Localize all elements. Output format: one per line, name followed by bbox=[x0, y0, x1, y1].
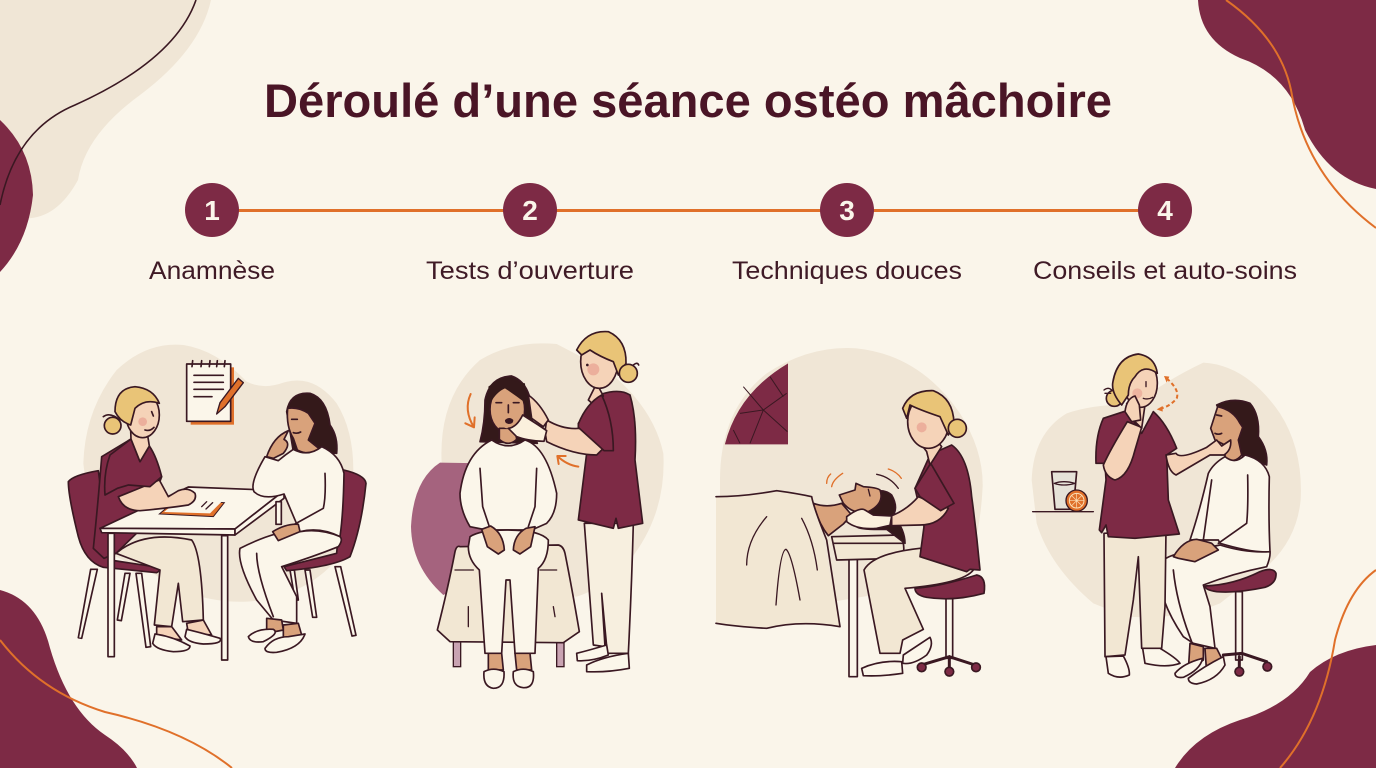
nurse arm, torso and head bbox=[103, 387, 195, 511]
patient bbox=[240, 393, 344, 652]
illustration: techniques douces bbox=[716, 348, 985, 677]
stool bbox=[1205, 570, 1276, 676]
background blob bbox=[83, 345, 353, 602]
step 4 marker: 4 bbox=[1157, 195, 1173, 226]
drape bbox=[716, 491, 840, 628]
step 2 marker: 2 bbox=[522, 195, 538, 226]
step 3 marker: 3 bbox=[839, 195, 855, 226]
therapist bbox=[847, 391, 980, 676]
step 2 marker bbox=[503, 183, 557, 237]
table bbox=[100, 487, 284, 660]
stool bbox=[915, 575, 985, 676]
therapist bbox=[1096, 354, 1231, 677]
patient bbox=[460, 376, 557, 688]
patient lying bbox=[813, 469, 905, 543]
step 3 marker bbox=[820, 183, 874, 237]
nurse bbox=[508, 332, 643, 672]
right chair bbox=[284, 470, 366, 636]
step 3 label: Techniques douces bbox=[732, 257, 962, 285]
background blob bbox=[1032, 363, 1301, 617]
mauve blob bbox=[411, 463, 487, 595]
decoration: bottom-right blob bbox=[1175, 570, 1376, 768]
illustration: anamnèse consultation bbox=[68, 345, 366, 660]
treatment stool bbox=[437, 545, 579, 667]
left chair bbox=[68, 471, 160, 647]
step 1 marker bbox=[185, 183, 239, 237]
decoration: top-left blobs bbox=[0, 0, 211, 272]
illustration: tests d'ouverture bbox=[411, 332, 664, 688]
step 4 label: Conseils et auto-soins bbox=[1033, 257, 1297, 285]
step 2 label: Tests d’ouverture bbox=[426, 257, 634, 285]
orange dashed arrow bbox=[1157, 376, 1177, 412]
step 1 marker: 1 bbox=[204, 195, 220, 226]
illustration: conseils et auto-soins bbox=[1032, 354, 1301, 684]
decoration: top-right blob bbox=[1198, 0, 1376, 228]
timeline bbox=[185, 183, 1192, 237]
title: Déroulé d’une séance ostéo mâchoire bbox=[264, 74, 1112, 127]
shelf, glass and orange bbox=[1033, 472, 1093, 512]
decoration: bottom-left blob bbox=[0, 590, 232, 768]
background blob bbox=[720, 348, 983, 602]
orange arrows bbox=[465, 394, 578, 467]
window bbox=[725, 364, 788, 444]
step 1 label: Anamnèse bbox=[149, 257, 275, 285]
patient bbox=[1157, 400, 1270, 684]
background blob bbox=[441, 343, 664, 597]
icon: notepad and pen bbox=[187, 361, 243, 425]
nurse legs and body bbox=[93, 439, 220, 652]
step 4 marker bbox=[1138, 183, 1192, 237]
notebook on table bbox=[159, 499, 224, 517]
table bbox=[832, 535, 904, 677]
